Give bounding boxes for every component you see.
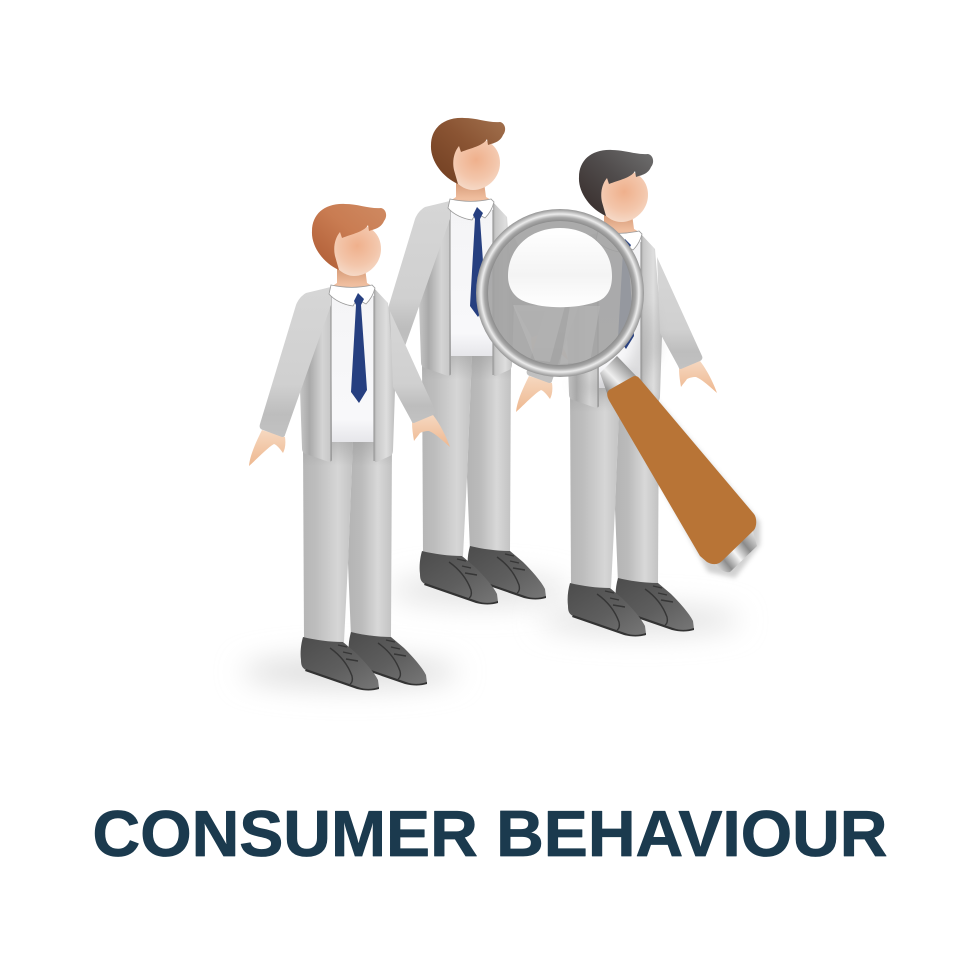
front man hair: [312, 204, 386, 270]
middle man hair: [431, 118, 505, 184]
figure: front man: [249, 204, 450, 690]
figure: right man: [516, 150, 717, 636]
middle man face: [447, 138, 500, 190]
icon: magnifying glass: [482, 215, 760, 578]
magnifier lens reflection: [508, 228, 612, 307]
ground shadows: [242, 576, 740, 687]
figure: middle man: [368, 118, 569, 604]
title: CONSUMER BEHAVIOUR: [92, 797, 888, 870]
magnifier handle: [607, 376, 756, 564]
magnifier neck: [600, 356, 640, 402]
right man face: [595, 170, 648, 222]
right man hair: [579, 150, 653, 216]
magnifier lens: [487, 220, 633, 366]
magnifier ring: [482, 215, 638, 371]
magnifier handle end cap: [714, 528, 757, 572]
front man face: [328, 224, 381, 276]
